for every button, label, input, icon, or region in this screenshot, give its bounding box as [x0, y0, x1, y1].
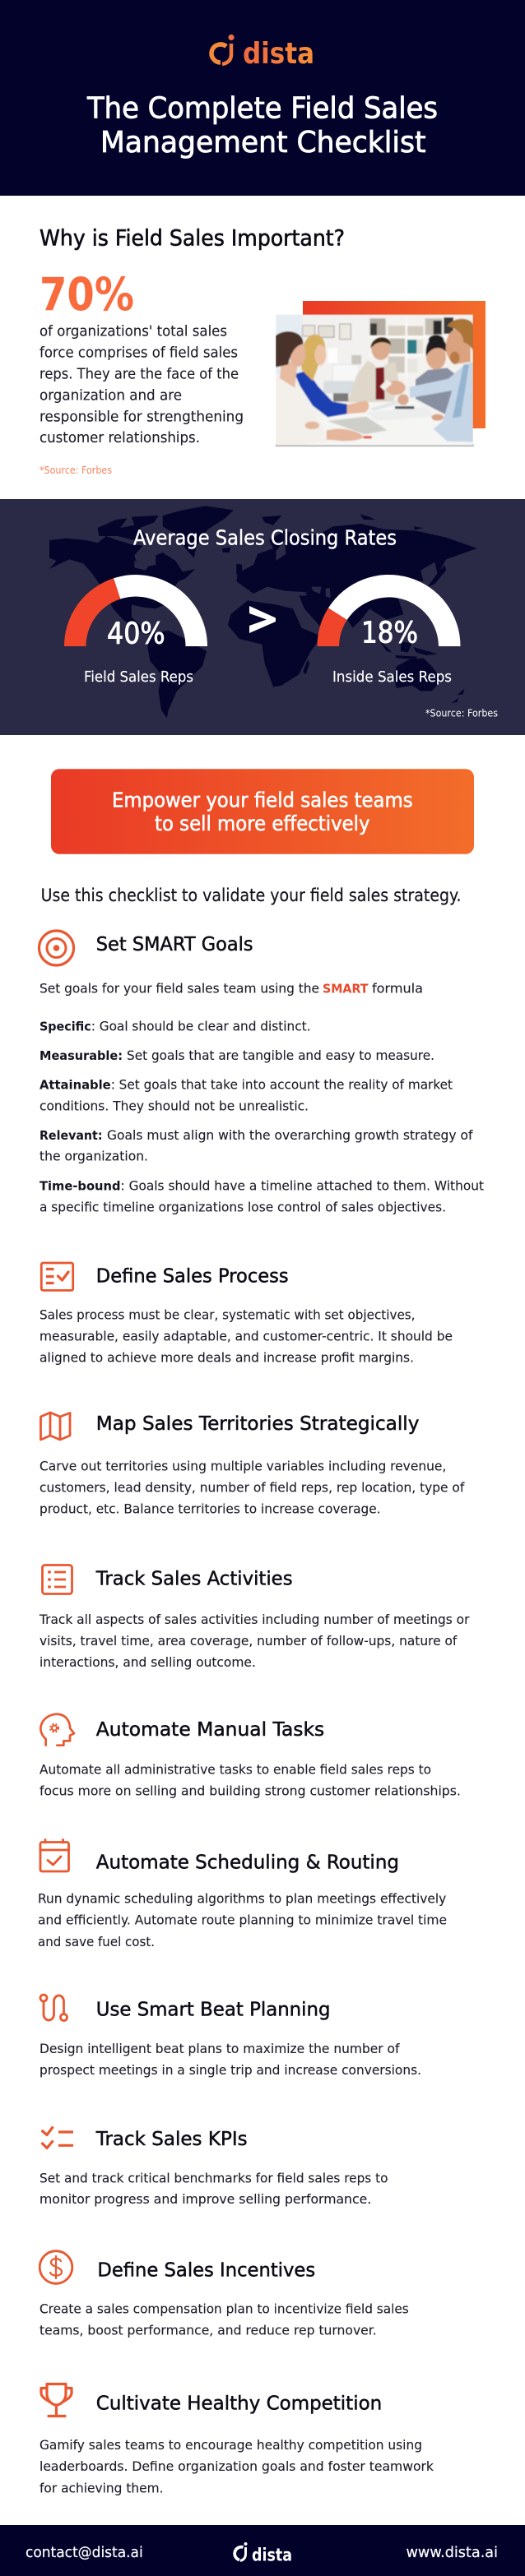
- icon: route: [40, 1995, 67, 2021]
- man centre: [348, 360, 398, 402]
- body: focus more on selling and building strong customer relationships.: [39, 1783, 461, 1799]
- heading: Map Sales Territories Strategically: [96, 1412, 419, 1435]
- heading: Set SMART Goals: [96, 932, 253, 955]
- relevant: Relevant:: [39, 1128, 102, 1143]
- paragraph: responsible for strengthening: [39, 409, 244, 425]
- specific: : Goal should be clear and distinct.: [91, 1018, 310, 1034]
- paragraph: organization and are: [39, 387, 182, 404]
- body: [39, 1612, 470, 1670]
- formula intro: Set goals for your field sales team using the: [39, 981, 319, 997]
- comparison symbol: greater than: [249, 606, 276, 633]
- paragraph: of organizations' total sales: [39, 324, 227, 340]
- heading: Why is Field Sales Important?: [39, 225, 345, 252]
- man right: [410, 362, 473, 442]
- formula intro: formula: [372, 981, 423, 997]
- world map background: [49, 506, 477, 719]
- front hand and pen: [327, 429, 364, 441]
- attainable: Attainable: [39, 1078, 111, 1093]
- relevant: Goals must align with the overarching growth strategy of: [107, 1127, 473, 1143]
- label: inside sales reps: Inside Sales Reps: [332, 668, 452, 686]
- heading: Automate Scheduling & Routing: [96, 1850, 399, 1873]
- section: why field sales: [39, 225, 486, 476]
- body: Create a sales compensation plan to incentivize field sales: [39, 2301, 409, 2317]
- source note: *Source: Forbes: [39, 464, 112, 476]
- item: smart beat planning: [39, 1995, 421, 2078]
- logo: dista: dista: [243, 37, 314, 71]
- specific: Specific: [39, 1019, 91, 1034]
- contact email: contact@dista.ai: [26, 2544, 143, 2561]
- body: Automate all administrative tasks to enable field sales reps to: [39, 1761, 431, 1778]
- icon: target: [39, 931, 74, 965]
- table: [276, 400, 473, 446]
- body: and efficiently. Automate route planning to minimize travel time: [38, 1912, 447, 1928]
- gauge: inside sales reps 18%: [318, 575, 461, 650]
- blonde woman: [295, 371, 347, 417]
- laptop: [328, 417, 388, 434]
- body: [39, 1307, 453, 1365]
- item: automate scheduling and routing: [38, 1840, 447, 1949]
- item: cultivate healthy competition: [39, 2384, 434, 2496]
- body: [39, 2301, 409, 2338]
- time-bound: Time-bound: [39, 1178, 120, 1193]
- icon: calendar check: [40, 1840, 69, 1871]
- body: and save fuel cost.: [38, 1934, 155, 1949]
- heading: Track Sales Activities: [95, 1567, 293, 1590]
- paragraph: [39, 324, 244, 446]
- formula intro: SMART: [323, 982, 369, 997]
- measurable: Set goals that are tangible and easy to measure.: [127, 1048, 434, 1063]
- attainable: : Set goals that take into account the reality of market: [111, 1077, 453, 1093]
- heading: Cultivate Healthy Competition: [96, 2392, 382, 2415]
- orange backing rectangle: [303, 301, 486, 428]
- body: monitor progress and improve selling performance.: [39, 2191, 371, 2207]
- paragraph: customer relationships.: [39, 430, 200, 446]
- item: automate manual tasks: [39, 1714, 461, 1799]
- woman right: [416, 368, 455, 415]
- heading: Define Sales Process: [96, 1264, 289, 1287]
- footer logo: dista: [252, 2546, 292, 2565]
- item: map sales territories: [39, 1412, 465, 1516]
- time-bound: : Goals should have a timeline attached to them. Without: [120, 1177, 484, 1193]
- intro line: Use this checklist to validate your field sales strategy.: [41, 886, 462, 905]
- item: track sales activities: [39, 1565, 470, 1670]
- heading: Use Smart Beat Planning: [96, 1997, 331, 2020]
- handshake: [386, 381, 406, 395]
- body: Sales process must be clear, systematic with set objectives,: [39, 1307, 415, 1323]
- panel heading: Average Sales Closing Rates: [133, 526, 397, 550]
- body: Design intelligent beat plans to maximize the number of: [39, 2041, 400, 2056]
- call to action banner: [51, 769, 474, 854]
- body: [39, 1458, 465, 1516]
- body: Carve out territories using multiple variables including revenue,: [39, 1458, 446, 1473]
- gauge: field sales reps 40%: [64, 575, 207, 651]
- icon: dollar coin: [39, 2251, 72, 2283]
- icon: head with gear: [40, 1714, 74, 1746]
- icon: checklist card: [41, 1263, 73, 1290]
- icon: trophy: [41, 2384, 72, 2416]
- body: Run dynamic scheduling algorithms to plan meetings effectively: [38, 1891, 446, 1907]
- icon: list: [43, 1565, 72, 1593]
- body: teams, boost performance, and reduce rep turnover.: [39, 2323, 377, 2338]
- body: Set and track critical benchmarks for field sales reps to: [39, 2170, 388, 2185]
- time-bound: a specific timeline organizations lose control of sales objectives.: [39, 1199, 446, 1214]
- body: customers, lead density, number of field reps, rep location, type of: [39, 1479, 465, 1495]
- item: set smart goals: [39, 931, 484, 1214]
- item: define sales incentives: [39, 2251, 409, 2338]
- body: for achieving them.: [39, 2480, 163, 2496]
- body: [39, 2041, 421, 2078]
- attainable: [39, 1077, 453, 1113]
- heading: Track Sales KPIs: [95, 2127, 248, 2150]
- body: [39, 1761, 461, 1799]
- icon: check list: [41, 2126, 73, 2148]
- body: measurable, easily adaptable, and customer-centric. It should be: [39, 1328, 453, 1343]
- body: aligned to achieve more deals and increase profit margins.: [39, 1349, 414, 1365]
- call to action banner: Empower your field sales teams: [112, 789, 413, 812]
- call to action banner: to sell more effectively: [155, 812, 370, 835]
- body: leaderboards. Define organization goals and foster teamwork: [39, 2458, 434, 2474]
- body: [38, 1891, 447, 1949]
- body: product, etc. Balance territories to increase coverage.: [39, 1501, 381, 1516]
- relevant: the organization.: [39, 1149, 148, 1164]
- icon: folded map: [41, 1413, 70, 1440]
- item: track sales kpis: [39, 2126, 388, 2207]
- website: www.dista.ai: [407, 2544, 498, 2561]
- gauge: inside sales reps 18%: 18%: [361, 617, 418, 650]
- title: [86, 92, 438, 160]
- logo: dista: [211, 35, 314, 71]
- body: Track all aspects of sales activities including number of meetings or: [39, 1612, 470, 1627]
- body: visits, travel time, area coverage, number of follow-ups, nature of: [39, 1633, 458, 1649]
- stat: 70%: 70%: [39, 268, 134, 321]
- paragraph: reps. They are the face of the: [39, 366, 239, 382]
- header panel: [0, 0, 525, 196]
- measurable: Measurable:: [39, 1048, 123, 1063]
- heading: Automate Manual Tasks: [96, 1718, 324, 1741]
- paragraph: force comprises of field sales: [39, 345, 238, 361]
- panel: average sales closing rates: [0, 499, 525, 735]
- label: field sales reps: Field Sales Reps: [84, 668, 193, 686]
- body: prospect meetings in a single trip and increase conversions.: [39, 2062, 421, 2078]
- body: [39, 2437, 434, 2496]
- body: interactions, and selling outcome.: [39, 1654, 256, 1670]
- title: The Complete Field Sales: [86, 92, 438, 125]
- attainable: conditions. They should not be unrealistic.: [39, 1098, 309, 1113]
- relevant: [39, 1127, 473, 1164]
- title: Management Checklist: [100, 126, 426, 160]
- photo: handshake at meeting: [276, 314, 474, 446]
- body: [39, 2170, 388, 2207]
- left woman: [276, 418, 326, 444]
- item: define sales process: [39, 1263, 453, 1365]
- body: Gamify sales teams to encourage healthy competition using: [39, 2437, 422, 2453]
- heading: Define Sales Incentives: [97, 2258, 315, 2281]
- arm near: [397, 394, 409, 405]
- time-bound: [39, 1177, 484, 1214]
- source note: *Source: Forbes: [425, 707, 498, 719]
- gauge: field sales reps 40%: 40%: [107, 617, 165, 651]
- footer logo: [235, 2542, 292, 2565]
- footer: [0, 2525, 525, 2576]
